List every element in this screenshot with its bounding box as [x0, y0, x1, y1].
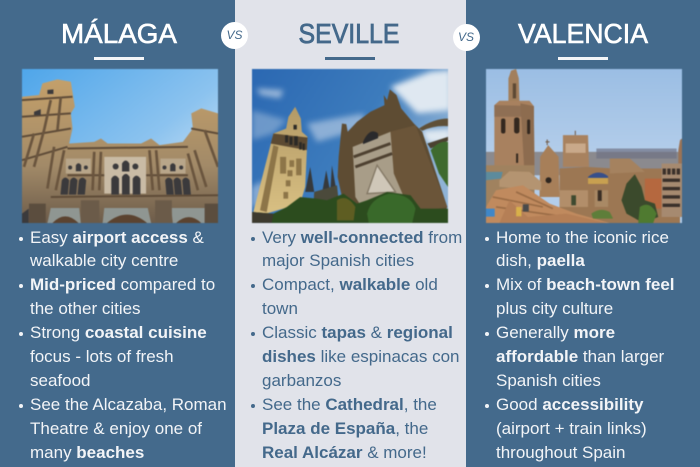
bullet item: coastal cuisine: focus - lots of fresh — [30, 347, 174, 366]
bullet item: sights: Plaza de España, the — [262, 419, 428, 438]
bullet item: accessibility: (airport + train links) — [496, 419, 647, 438]
heading: Málaga: MÁLAGA — [61, 18, 177, 49]
bullet item: well-connected: major Spanish cities — [262, 251, 414, 270]
bullet item: walkable: Compact, walkable old — [262, 275, 438, 294]
panel: Seville background — [235, 0, 466, 467]
bullet item: tapas: garbanzos — [262, 371, 341, 390]
bullet item: accessibility: Good accessibility — [496, 395, 643, 414]
text block: Seville highlights — [251, 228, 462, 462]
photo: Málaga cathedral — [21, 68, 219, 224]
bullet item: sights and beaches: See the Alcazaba, Roman — [30, 395, 227, 414]
bullet item: well-connected — [251, 228, 462, 270]
bullet item: walkable — [251, 275, 438, 318]
underline: Seville — [325, 57, 375, 60]
bullet item: accessibility — [485, 395, 647, 462]
headings: city names — [61, 18, 648, 49]
bullet item: walkable: town — [262, 299, 298, 318]
bullet item: tapas — [251, 323, 460, 390]
bullet item: affordable: Generally more — [496, 323, 615, 342]
bullet item: mid-priced — [19, 275, 215, 318]
bullet item: tapas: dishes like espinacas con — [262, 347, 460, 366]
badge: VS right: VS — [458, 30, 474, 44]
bullet item: sights and beaches: Theatre & enjoy one of — [30, 419, 202, 438]
bullet item: paella: Home to the iconic rice — [496, 228, 669, 246]
bullet item: airport access: walkable city centre — [30, 251, 178, 270]
bullet item: sights and beaches — [19, 395, 227, 462]
photo: Seville Giralda and cathedral — [251, 68, 449, 224]
bullet item: beach-town feel: Mix of beach-town feel — [496, 275, 675, 294]
badge: VS right — [452, 24, 480, 51]
bullet item: coastal cuisine — [19, 323, 207, 390]
text block: Valencia highlights — [485, 228, 675, 462]
panel: Valencia background — [466, 0, 700, 467]
bullet item: mid-priced: Mid-priced compared to — [30, 275, 215, 294]
text block: Málaga highlights — [19, 228, 227, 462]
heading: Seville: SEVILLE — [298, 18, 400, 49]
bullet item: affordable: affordable than larger — [496, 347, 664, 366]
bullet item: affordable: Spanish cities — [496, 371, 601, 390]
bullet item: beach-town feel — [485, 275, 675, 318]
underline: Valencia — [558, 57, 608, 60]
bullet item: sights: See the Cathedral, the — [262, 395, 437, 414]
photo: Valencia skyline — [485, 68, 683, 224]
bullet item: sights — [251, 395, 437, 462]
bullet item: paella: dish, paella — [496, 251, 585, 270]
bullet item: sights: Real Alcázar & more! — [262, 443, 427, 462]
bullet item: sights and beaches: many beaches — [30, 443, 144, 462]
panel: Málaga background — [0, 0, 235, 467]
badge: VS left — [221, 22, 248, 49]
bullet item: coastal cuisine: seafood — [30, 371, 90, 390]
badge: VS left: VS — [226, 28, 242, 42]
bullet item: coastal cuisine: Strong coastal cuisine — [30, 323, 207, 342]
bullet item: mid-priced: the other cities — [30, 299, 141, 318]
bullet item: tapas: Classic tapas & regional — [262, 323, 453, 342]
bullet item: airport access — [19, 228, 204, 270]
bullet item: well-connected: Very well-connected from — [262, 228, 462, 246]
bullet item: beach-town feel: plus city culture — [496, 299, 613, 318]
bullet item: paella — [485, 228, 669, 270]
bullet item: airport access: Easy airport access & — [30, 228, 204, 246]
bullet item: accessibility: throughout Spain — [496, 443, 626, 462]
underline: Málaga — [94, 57, 144, 60]
bullet item: affordable — [485, 323, 664, 390]
heading: Valencia: VALENCIA — [518, 18, 648, 49]
